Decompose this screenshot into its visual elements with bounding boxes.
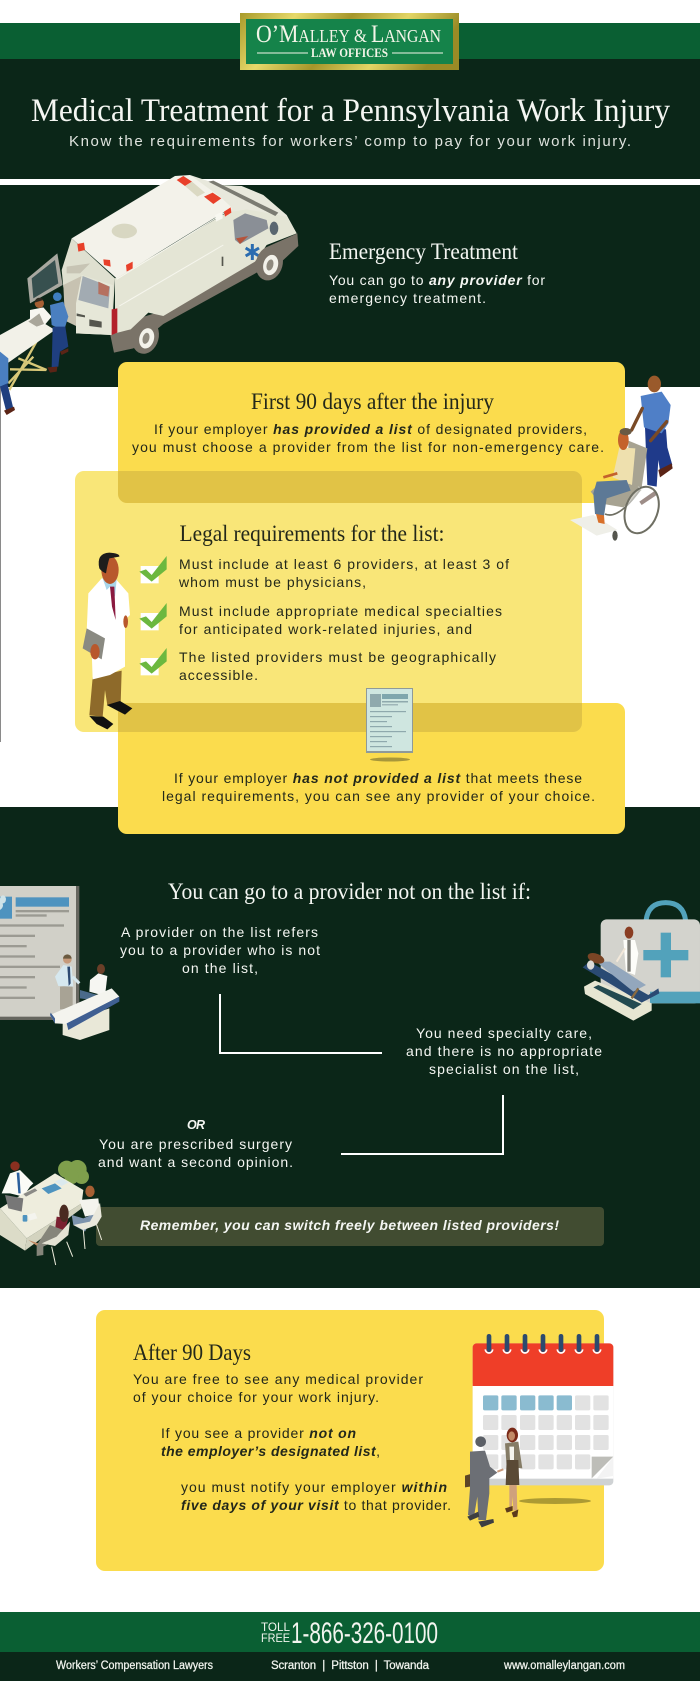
text: requirement 2: Must include appropriate medical specialties <box>179 603 502 619</box>
text: no list provided body: legal requirements, you can see any provider of your choice. <box>162 788 595 804</box>
text: requirement 2: for anticipated work-related injuries, and <box>179 621 472 637</box>
title: Medical Treatment for a Pennsylvania Work Injury <box>31 93 670 129</box>
text: notify employer: five days of your visit to that provider. <box>181 1497 451 1513</box>
icon: check 3 <box>139 648 167 675</box>
text: specialty care condition <box>406 1025 602 1077</box>
icon: consultation desk <box>0 1160 102 1265</box>
footer: phone band <box>0 1612 700 1652</box>
text: notify employer: you must notify your employer within <box>181 1479 447 1495</box>
text: no list provided body: If your employer has not provided a list that meets these <box>174 770 582 786</box>
arrow: connector from specialty to surgery <box>341 1095 503 1154</box>
panel: after 90 days <box>96 1310 604 1571</box>
heading: first 90 days: First 90 days after the injury <box>251 389 494 414</box>
icon: medical kit with doctor and patient <box>583 903 700 1021</box>
text: provider not on list: If you see a provider not on <box>161 1425 356 1441</box>
text: requirement 3 <box>179 649 496 683</box>
text: provider not on list <box>161 1425 380 1459</box>
text: emergency treatment body <box>329 272 545 306</box>
header dark panel <box>0 59 700 179</box>
text: first 90 days body <box>132 421 604 455</box>
icon: wheelchair patient with carer <box>570 376 673 541</box>
text: requirement 3: accessible. <box>179 667 258 683</box>
text: second opinion condition: You are prescribed surgery <box>99 1136 292 1152</box>
text: referral condition: on the list, <box>182 960 258 976</box>
icon: ambulance with medics and stretcher <box>0 175 298 415</box>
text: requirement 2 <box>179 603 502 637</box>
left edge rule <box>0 387 1 742</box>
text: requirement 1: whom must be physicians, <box>178 574 366 590</box>
text: requirement 3: The listed providers must be geographically <box>179 649 496 665</box>
text: requirement 1: Must include at least 6 providers, at least 3 of <box>179 556 509 572</box>
footer: toll free phone number: FREE <box>261 1631 290 1645</box>
heading: emergency treatment: Emergency Treatment <box>329 239 519 264</box>
panel: no list provided <box>118 703 625 834</box>
text: referral condition: you to a provider who is not <box>120 942 320 958</box>
text: second opinion condition: and want a second opinion. <box>98 1154 293 1170</box>
icon: document <box>366 688 413 762</box>
text: notify employer <box>181 1479 451 1513</box>
header green band <box>0 23 700 59</box>
footer: tagline: Workers’ Compensation Lawyers <box>56 1660 213 1672</box>
text: specialty care condition: specialist on the list, <box>429 1061 579 1077</box>
footer: links band <box>0 1652 700 1681</box>
checklist: legal requirements <box>139 556 509 683</box>
text: referral condition: A provider on the list refers <box>121 924 318 940</box>
icon: check 1 <box>139 556 167 583</box>
text: or label: OR <box>187 1118 205 1132</box>
callout: reminder bar: Remember, you can switch freely between listed providers! <box>140 1217 559 1233</box>
subtitle: Know the requirements for workers’ comp to pay for your work injury. <box>69 133 631 150</box>
text: free to see any provider: of your choice for your work injury. <box>133 1389 379 1405</box>
text: first 90 days body: you must choose a provider from the list for non-emergency care. <box>132 439 604 455</box>
panel: provider not on list background <box>0 807 700 1288</box>
footer: toll free phone number: TOLL <box>261 1620 290 1634</box>
footer: website: www.omalleylangan.com <box>503 1660 625 1672</box>
panel: first 90 days <box>118 362 625 503</box>
arrow: connector from referral to specialty <box>220 994 382 1053</box>
text: emergency treatment body: You can go to any provider for <box>329 272 545 288</box>
logo: O’MALLEY & LANGAN <box>256 21 441 48</box>
text: specialty care condition: You need specialty care, <box>416 1025 592 1041</box>
footer: toll free phone number <box>261 1617 438 1650</box>
heading: legal requirements: Legal requirements for the list: <box>180 521 444 546</box>
heading: provider not on the list: You can go to a provider not on the list if: <box>168 879 531 904</box>
text: no list provided body <box>162 770 595 804</box>
text: referral condition <box>120 924 320 976</box>
text: provider not on list: the employer’s designated list, <box>161 1443 380 1459</box>
text: second opinion condition <box>98 1136 293 1170</box>
text: emergency treatment body: emergency treatment. <box>329 290 486 306</box>
icon: calendar with handshake <box>465 1334 613 1527</box>
icon: check 2 <box>139 603 167 630</box>
text: first 90 days body: If your employer has provided a list of designated providers, <box>154 421 587 437</box>
text: free to see any provider <box>133 1371 423 1405</box>
text: specialty care condition: and there is no appropriate <box>406 1043 602 1059</box>
logo <box>240 13 459 70</box>
footer: office locations: Scranton | Pittston | Towanda <box>271 1660 430 1672</box>
footer: toll free phone number: 1-866-326-0100 <box>291 1617 438 1650</box>
panel: legal requirements <box>75 471 582 732</box>
callout: reminder bar <box>96 1207 604 1246</box>
heading: after 90 days: After 90 Days <box>133 1340 251 1365</box>
logo: LAW OFFICES <box>311 46 388 60</box>
icon: medical chart with doctor and patient <box>0 886 119 1040</box>
icon: doctor with clipboard <box>83 553 132 729</box>
panel: emergency treatment background <box>0 185 700 387</box>
text: free to see any provider: You are free to see any medical provider <box>133 1371 423 1387</box>
text: requirement 1 <box>178 556 509 590</box>
